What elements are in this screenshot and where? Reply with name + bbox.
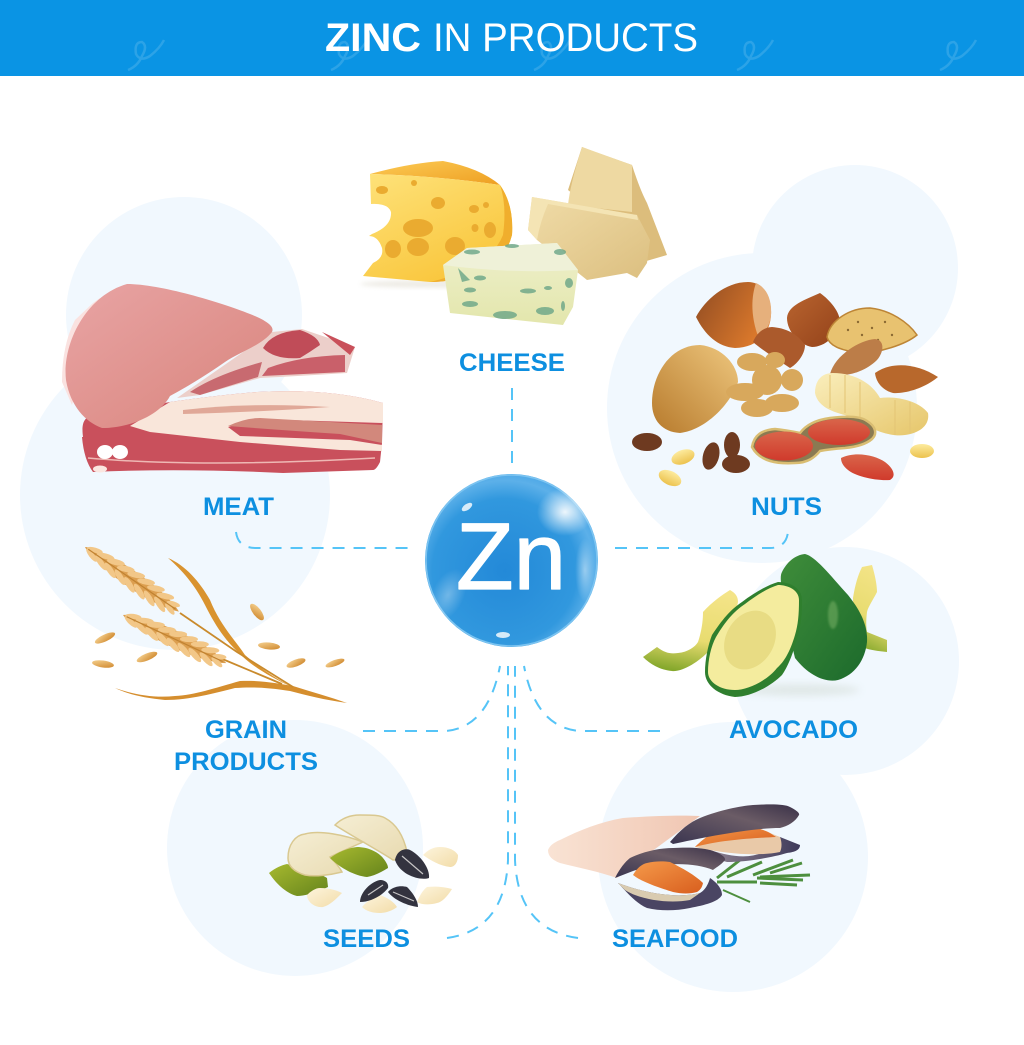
bottom leaf <box>115 681 347 703</box>
parmesan pieces <box>528 147 667 280</box>
long leaf <box>168 558 292 687</box>
rosemary <box>717 860 810 902</box>
scattered grains <box>92 602 345 670</box>
label: nuts: NUTS <box>751 493 822 521</box>
pumpkin seed back <box>335 815 407 860</box>
pumpkin seed front <box>288 833 363 876</box>
yellow pine kernels <box>656 444 934 489</box>
food: meat <box>62 284 383 473</box>
food: seafood <box>548 804 810 910</box>
background circles <box>20 165 959 992</box>
header banner <box>0 0 1024 76</box>
half avocado <box>705 582 802 697</box>
squid <box>548 816 700 878</box>
dashed connector lines <box>236 388 788 938</box>
label: meat: MEAT <box>203 493 274 521</box>
pine nuts <box>632 432 750 473</box>
label: grain products <box>174 716 318 776</box>
rib tail <box>177 329 355 398</box>
Zn sphere: Zn <box>456 504 566 610</box>
peanut open <box>752 417 875 463</box>
Zn sphere <box>422 474 598 647</box>
walnut kernel <box>726 352 803 417</box>
bacon <box>82 391 383 473</box>
label: grain products: PRODUCTS <box>174 748 318 776</box>
food: grain <box>78 537 347 703</box>
label: grain products: GRAIN <box>205 716 287 744</box>
walnut shell <box>652 345 738 433</box>
food: seeds <box>269 815 458 913</box>
pork loin <box>62 284 273 428</box>
green leaf seed <box>269 864 328 896</box>
label: seafood: SEAFOOD <box>612 925 738 953</box>
almond shell <box>827 308 938 393</box>
pale kernels <box>307 847 458 913</box>
stems <box>180 613 293 687</box>
food: cheese <box>360 147 667 325</box>
whole avocado <box>781 554 867 681</box>
label: avocado: AVOCADO <box>729 716 858 744</box>
peanut whole <box>815 373 928 435</box>
header banner: IN PRODUCTS <box>433 16 698 60</box>
left slice <box>643 590 738 671</box>
hazelnuts <box>696 282 840 368</box>
top mussel <box>670 804 800 862</box>
label: seeds: SEEDS <box>323 925 410 953</box>
food: nuts <box>632 282 938 489</box>
bottom mussel <box>615 848 725 910</box>
right slice <box>853 565 887 652</box>
sunflower seeds <box>360 849 429 907</box>
wheat ear lower <box>118 604 232 674</box>
header banner: ZINC <box>325 16 421 60</box>
red kernel <box>841 454 894 480</box>
food: avocado <box>643 554 887 697</box>
swiss wedge <box>363 161 512 282</box>
label: cheese: CHEESE <box>459 349 565 377</box>
wheat ear upper <box>78 537 186 622</box>
green seed <box>330 847 388 877</box>
blue cheese <box>443 243 578 325</box>
